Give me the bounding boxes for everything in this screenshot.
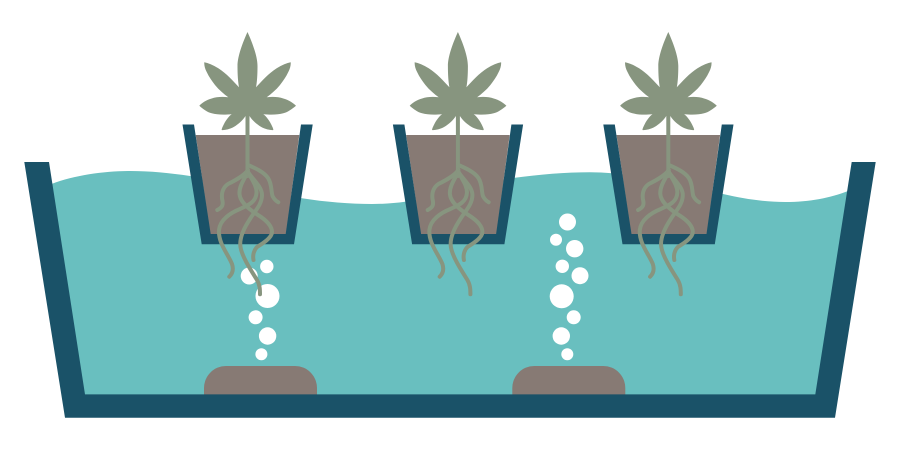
plant and pot 1 bbox=[182, 32, 313, 294]
soil bbox=[406, 135, 510, 236]
leaf bbox=[620, 32, 717, 130]
bubbles right bbox=[550, 214, 588, 360]
roots bbox=[638, 115, 699, 294]
soil bbox=[616, 135, 720, 236]
roots bbox=[217, 115, 278, 294]
water bbox=[52, 171, 848, 396]
roots bbox=[428, 115, 489, 294]
bubbles left bbox=[241, 260, 280, 360]
pot bbox=[393, 124, 523, 244]
air stone left bbox=[204, 366, 317, 396]
tank bbox=[24, 162, 876, 418]
soil bbox=[196, 135, 299, 236]
plant and pot 2 bbox=[393, 32, 523, 294]
leaf bbox=[410, 32, 506, 130]
plant and pot 3 bbox=[603, 32, 734, 294]
air stone right bbox=[512, 366, 625, 396]
pot bbox=[603, 124, 734, 244]
pot bbox=[182, 124, 313, 244]
leaf bbox=[199, 32, 296, 130]
